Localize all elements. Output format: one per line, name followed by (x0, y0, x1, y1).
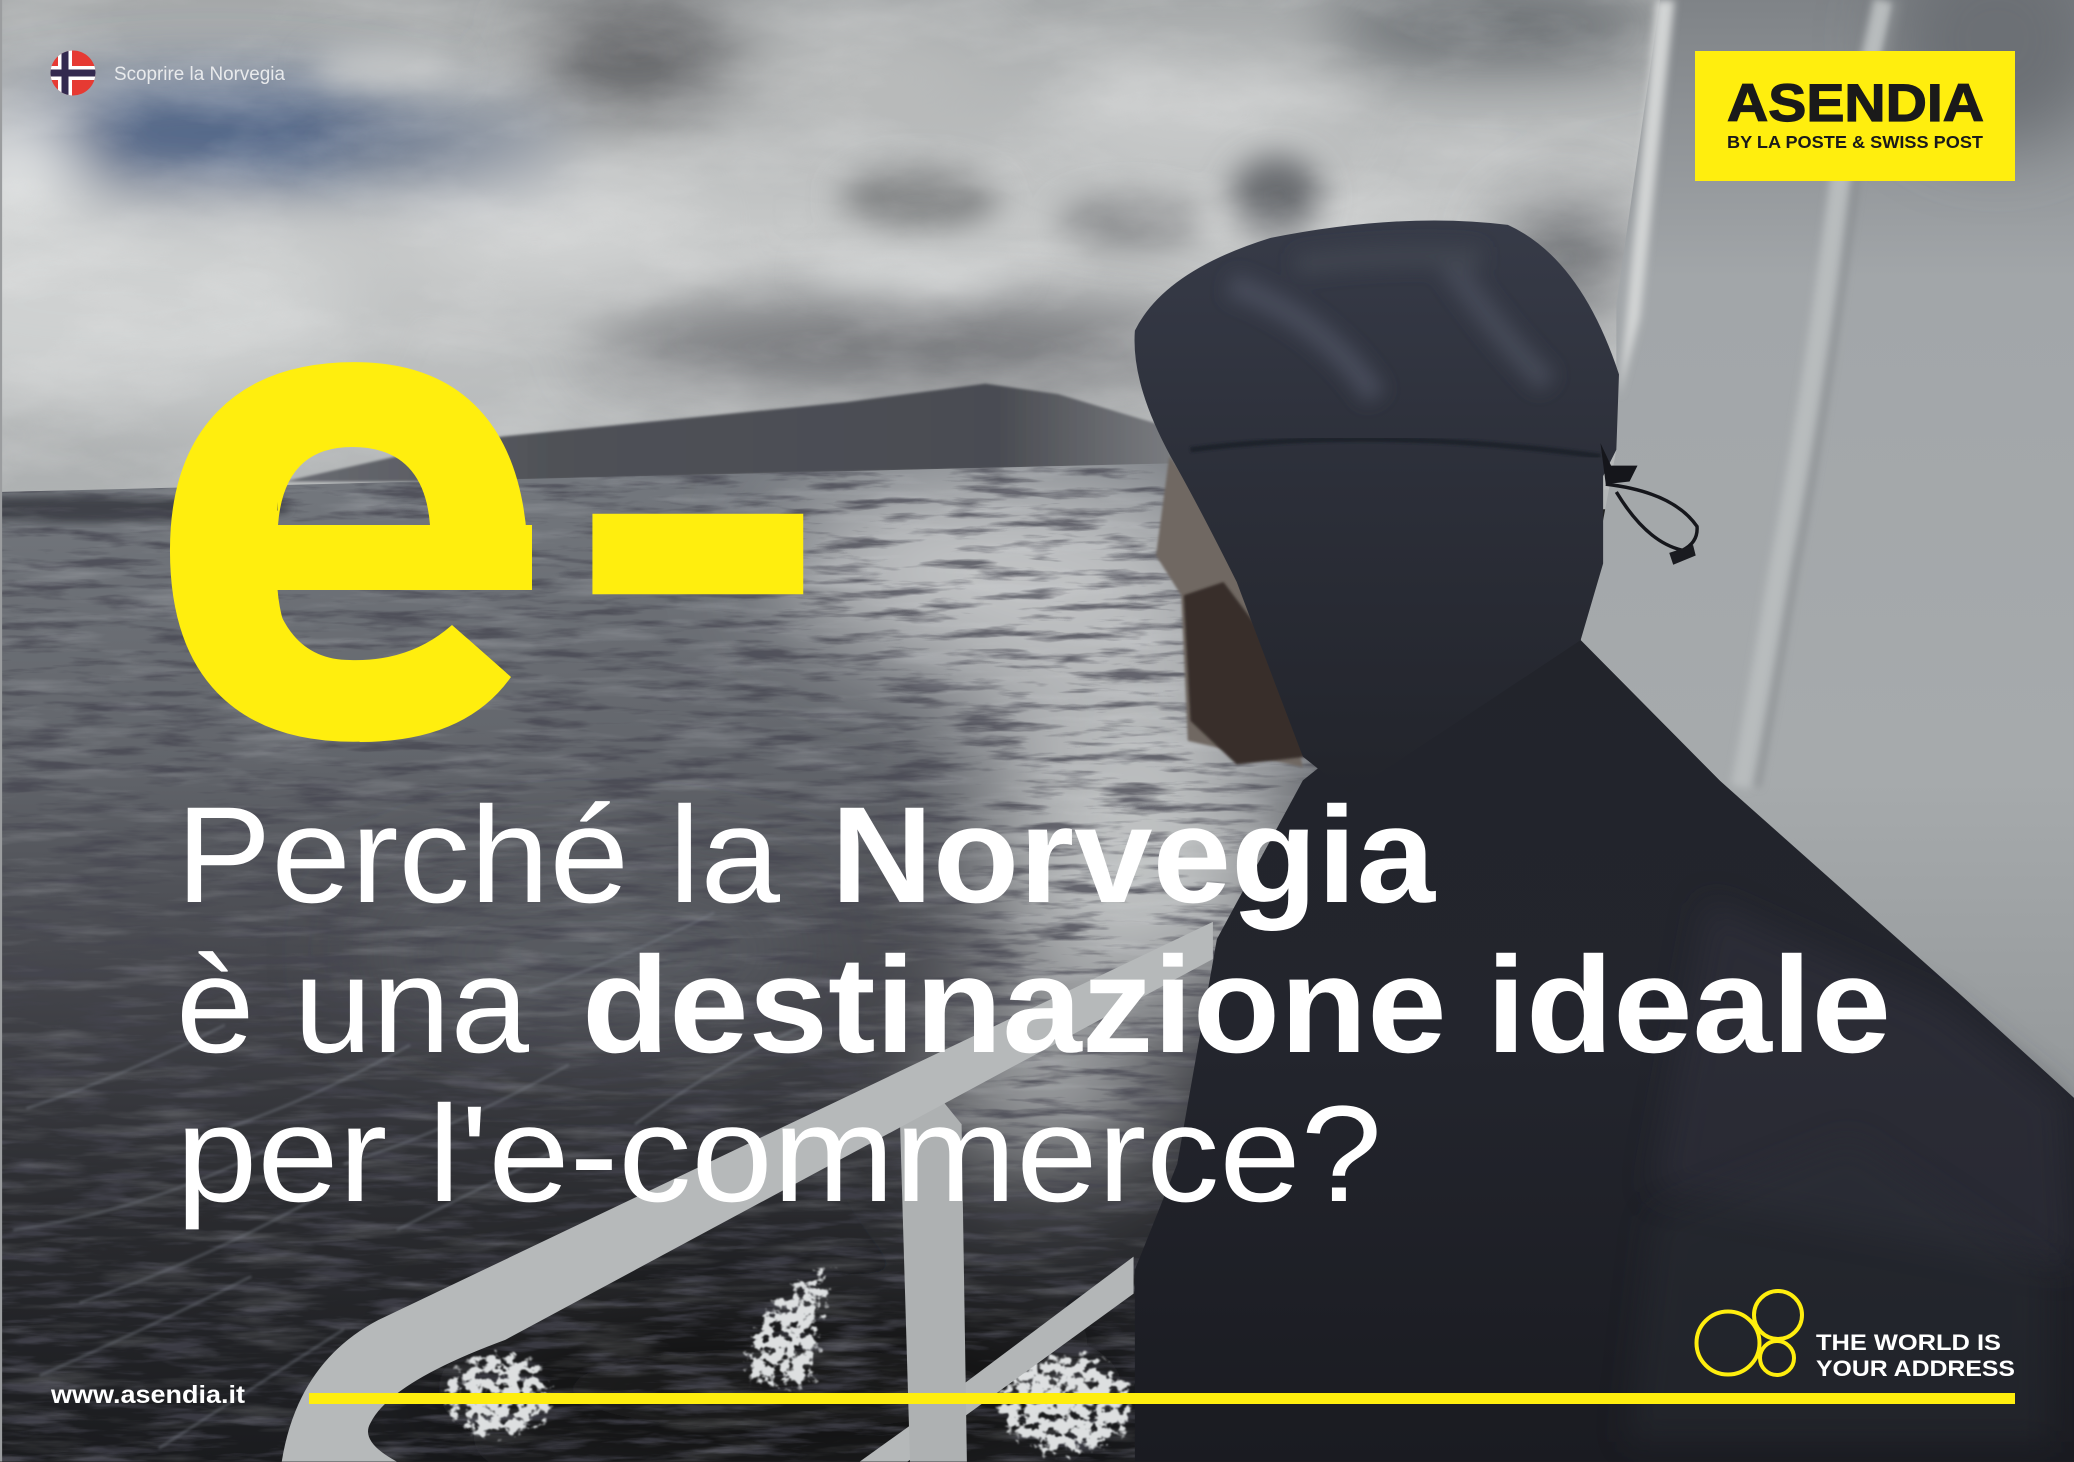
big yellow e- mark: e (141, 108, 553, 883)
main title: per l'e-commerce? (176, 1078, 1382, 1231)
country label: Scoprire la Norvegia (114, 64, 285, 85)
big yellow e- mark (170, 362, 804, 742)
website url: www.asendia.it (50, 1381, 246, 1409)
Asendia logo: ASENDIA (1727, 74, 1984, 133)
big yellow e- mark: - (560, 119, 836, 873)
sky with clouds (0, 0, 2074, 509)
sea (0, 463, 1455, 1462)
main title: è una (176, 929, 530, 1082)
ship railing (282, 922, 1213, 1462)
flag of Norway icon (50, 50, 96, 96)
main title: Perché la (176, 779, 781, 932)
hood drawcord (1600, 443, 1697, 565)
yellow footer bar (309, 1393, 2015, 1404)
jacket body (1135, 640, 2074, 1462)
main title: destinazione ideale (582, 929, 1891, 1082)
foam in ship wake (438, 1250, 1140, 1460)
distant mountains (284, 384, 1177, 481)
Asendia logo: BY LA POSTE & SWISS POST (1727, 132, 1983, 152)
icon: three circles (1696, 1291, 1802, 1375)
diagonal wave crests (13, 913, 820, 1448)
hood folds (1230, 251, 1548, 397)
tagline: YOUR ADDRESS (1816, 1356, 2015, 1381)
main title: Norvegia (831, 779, 1437, 932)
main title (176, 779, 1891, 1231)
Asendia logo (1695, 51, 2015, 181)
hood (1135, 220, 1619, 794)
tagline (1816, 1330, 2015, 1381)
man in hooded jacket (1135, 220, 2074, 1462)
tagline: THE WORLD IS (1816, 1330, 2001, 1355)
ship wall (1581, 0, 2074, 1111)
face and beard (1156, 456, 1307, 767)
